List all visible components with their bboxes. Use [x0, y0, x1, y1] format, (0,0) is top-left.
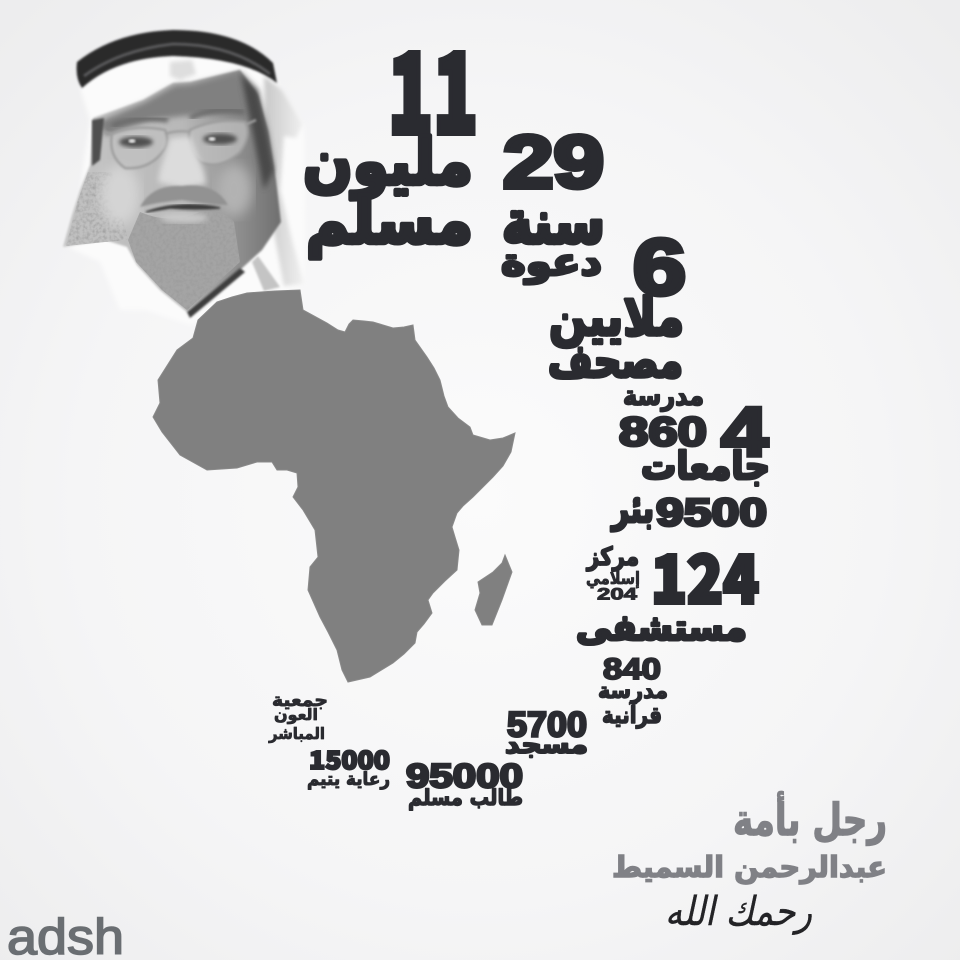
chin shadow and collar [187, 268, 245, 318]
stat: 5700 mosques [505, 706, 588, 759]
label center: مركز [585, 542, 639, 572]
lower lip [160, 213, 208, 223]
number 4: 4 [721, 393, 768, 471]
moustache [140, 185, 228, 207]
label Muslim student: طالب مسلم [408, 786, 523, 811]
number 124: 124 [651, 527, 759, 623]
line society: جمعية [272, 690, 328, 711]
face [63, 70, 281, 312]
brows [112, 118, 168, 126]
number 29: 29 [503, 120, 604, 204]
side beard left [66, 172, 128, 246]
Direct Aid Society label [268, 690, 328, 743]
label Quran copies: مصحف [548, 334, 683, 388]
label universities: جامعات [641, 444, 770, 488]
Madagascar [475, 555, 512, 625]
line direct: المباشر [268, 724, 325, 743]
map of Africa [153, 290, 515, 682]
scarf right side shading [264, 76, 304, 286]
cheeks [100, 165, 140, 225]
label million: مليون [303, 126, 473, 200]
temples [104, 120, 256, 134]
title block [612, 791, 887, 935]
label school: مدرسة [623, 381, 704, 412]
number 6: 6 [633, 222, 686, 311]
number 15000: 15000 [309, 741, 390, 777]
beard [128, 212, 240, 310]
stat: 29 years of da'wah [501, 120, 605, 284]
label mosque: مسجد [505, 730, 588, 759]
label school: مدرسة [598, 679, 668, 704]
number 204: 204 [597, 584, 638, 604]
stat: 11 million Muslims [303, 5, 478, 259]
mainland [153, 290, 515, 682]
title a man of a nation: رجل بأمة [733, 791, 887, 846]
stat: 6 million Qurans [548, 222, 686, 388]
scarf fold under head cord [170, 60, 196, 80]
label orphan care: رعاية يتيم [307, 769, 390, 790]
label millions: ملايين [549, 288, 684, 348]
number 840: 840 [603, 653, 661, 686]
stat: 15000 orphans sponsored [307, 741, 390, 790]
may God have mercy on him: رحمك الله [665, 889, 813, 935]
label hospital: مستشفى [576, 608, 747, 649]
nose [158, 136, 206, 188]
forehead shadow [98, 72, 254, 136]
label well: بئر [610, 487, 654, 531]
mouth [146, 205, 220, 212]
right lens [189, 121, 248, 164]
glasses [104, 120, 256, 168]
label Quranic: قرآنية [602, 700, 662, 729]
stat: 95000 Muslim students [406, 758, 523, 811]
left lens [111, 128, 167, 168]
stat: 840 Quran schools [598, 653, 668, 729]
number 95000: 95000 [406, 758, 523, 796]
stat: 204 Islamic centers, 124 hospitals [576, 527, 759, 649]
stat: 860 schools, 4 universities, 9500 wells [610, 381, 770, 534]
number 11: 11 [388, 5, 478, 165]
headscarf [70, 46, 305, 325]
label Islamic: إسلامي [586, 569, 640, 589]
name: عبدالرحمن السميط [612, 850, 887, 884]
label year: سنة [502, 188, 605, 258]
label da'wah: دعوة [501, 240, 602, 284]
number 860: 860 [619, 408, 707, 454]
agal highlight [84, 44, 270, 76]
agal head cord [77, 30, 277, 88]
bridge [165, 131, 190, 134]
portrait of Abdulrahman Al-Sumait [63, 30, 305, 325]
dark hair side right [240, 72, 274, 190]
dark hair side left [92, 118, 104, 166]
label Muslim: مسلم [306, 185, 473, 259]
number 9500: 9500 [656, 492, 767, 534]
number 5700: 5700 [507, 706, 587, 745]
line Al-Aoun: العون [274, 705, 318, 724]
eyes [119, 136, 153, 148]
